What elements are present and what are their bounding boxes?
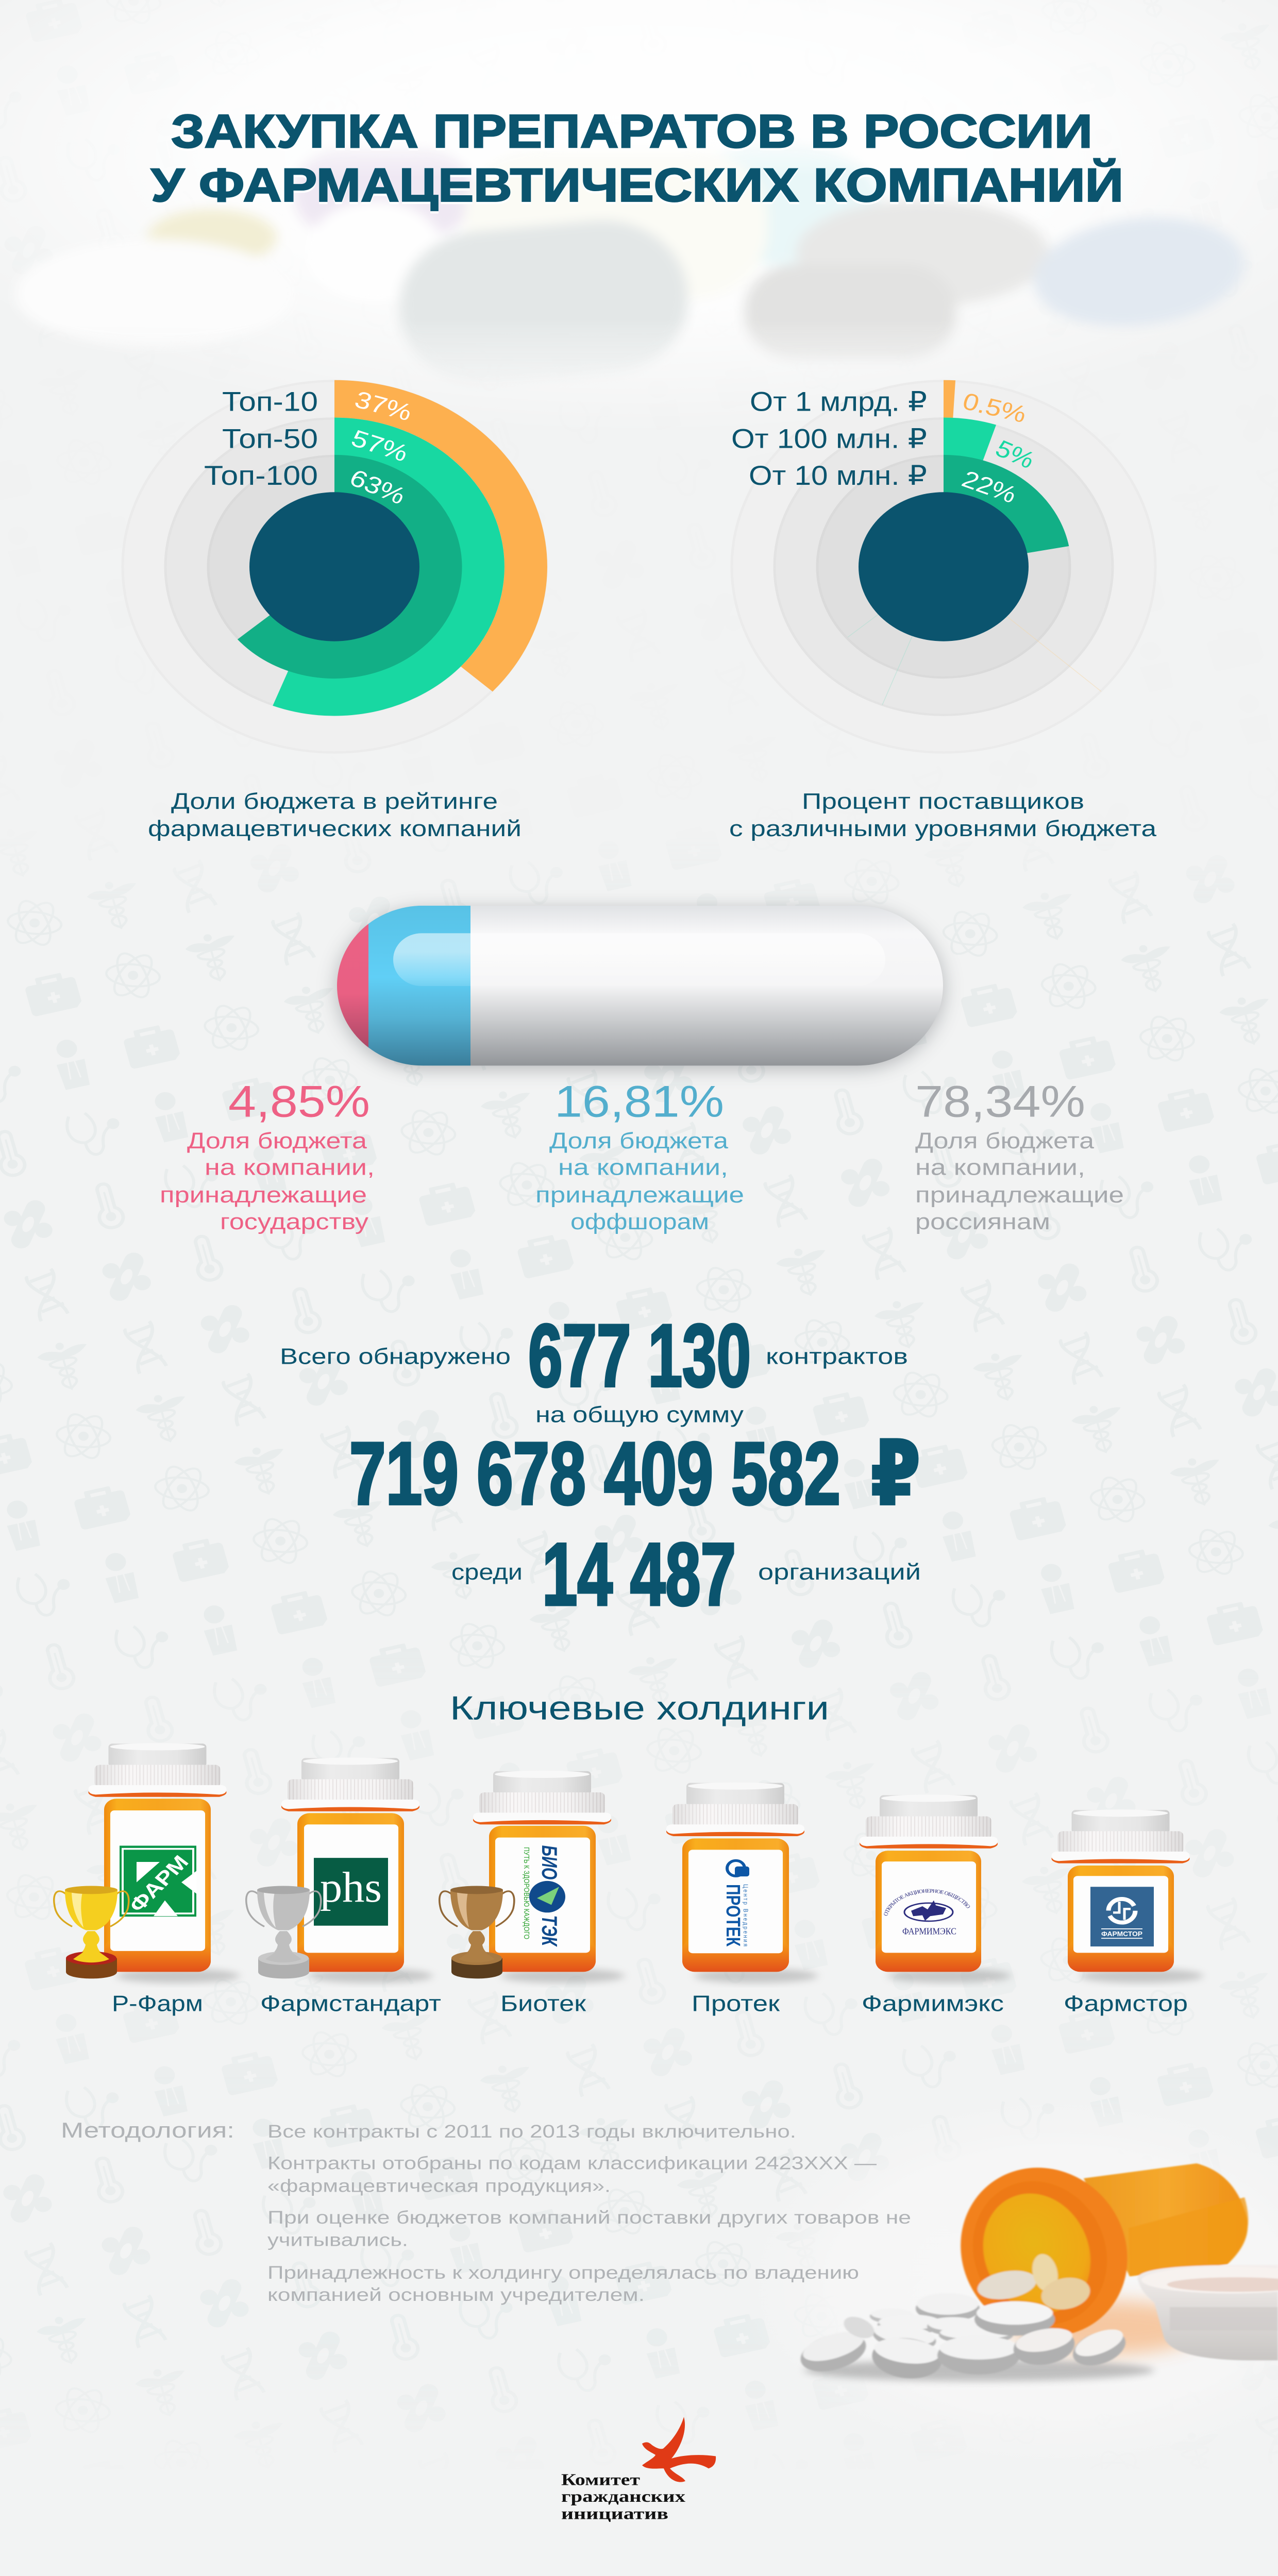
stat: offshore share: 16,81% — [554, 1077, 724, 1126]
segment: russians — [470, 906, 943, 1065]
bottle: Biotek — [473, 1771, 625, 1983]
methodology: Методология: — [61, 2118, 234, 2142]
chart caption — [148, 788, 522, 841]
capsule chart: budget ownership — [337, 906, 943, 1069]
contracts count: 677 130 — [528, 1307, 751, 1405]
organisations count: среди — [451, 1559, 523, 1584]
methodology — [61, 2118, 911, 2304]
logo: Pharmstandard: phs — [320, 1863, 382, 1911]
value labels — [345, 386, 415, 510]
stat: state share: государству — [220, 1209, 369, 1234]
bottle names: Р-Фарм — [112, 1990, 203, 2016]
contracts count: Всего обнаружено — [280, 1343, 511, 1369]
value labels: 63% — [345, 465, 410, 510]
pills in mouth — [974, 2266, 1039, 2303]
stat: offshore share: на компании, — [558, 1155, 728, 1180]
logo: Biotek: БИО — [537, 1845, 561, 1879]
bottle names: Фармимэкс — [862, 1990, 1004, 2016]
guide rings — [123, 381, 546, 753]
chart caption: Процент поставщиков — [802, 788, 1084, 814]
stat: state share: на компании, — [205, 1155, 375, 1180]
logo: Pharmstor: ФАРМСТОР — [1101, 1930, 1142, 1938]
stat: state share: принадлежащие — [160, 1182, 367, 1208]
title — [151, 105, 1123, 211]
bottle names — [112, 1990, 1188, 2016]
value labels: 5% — [991, 435, 1039, 474]
centre disc — [249, 492, 419, 641]
value labels: 22% — [958, 466, 1020, 509]
logo: Protek: Центр Внедрения — [742, 1884, 749, 1946]
methodology: Принадлежность к холдингу определялась по владению — [267, 2262, 859, 2282]
series labels: Топ-50 — [222, 423, 318, 453]
logo: Committee of Civil Initiatives — [561, 2417, 716, 2523]
logo: R-Pharm — [120, 1845, 196, 1917]
logo bird — [642, 2417, 716, 2482]
bottle names: Протек — [692, 1990, 780, 2016]
methodology: Контракты отобраны по кодам классификации 2423XXX — — [267, 2153, 877, 2173]
segment: offshore — [368, 906, 470, 1065]
contracts count: контрактов — [766, 1343, 908, 1369]
guide rings — [732, 381, 1155, 753]
panel: suppliers radial chart — [729, 381, 1157, 841]
heading: key holdings: Ключевые холдинги — [450, 1689, 829, 1727]
stat: russian share: Доля бюджета — [915, 1128, 1095, 1153]
series labels: Топ-100 — [204, 461, 318, 490]
logo: Pharmstor — [1090, 1887, 1154, 1946]
stat: russian share: принадлежащие — [915, 1182, 1124, 1208]
organisations count: 14 487 — [542, 1525, 736, 1624]
stat: state share: 4,85% — [228, 1077, 370, 1126]
title: У ФАРМАЦЕВТИЧЕСКИХ КОМПАНИЙ — [151, 158, 1123, 211]
total sum: на общую сумму — [535, 1401, 744, 1427]
chart caption: фармацевтических компаний — [148, 816, 522, 841]
logo: Protek — [722, 1860, 749, 1946]
stat: russian share: россиянам — [915, 1209, 1050, 1234]
bottle cap — [1137, 2265, 1278, 2361]
logo: Biotek: ТЭК — [537, 1916, 561, 1947]
contracts count — [280, 1307, 908, 1405]
series labels: Топ-10 — [222, 386, 318, 417]
arc: over 1 bln 0.5% — [944, 378, 954, 420]
stat: offshore share — [535, 1077, 744, 1234]
chart caption: с различными уровнями бюджета — [729, 816, 1157, 841]
chart caption: Доли бюджета в рейтинге — [171, 788, 498, 814]
bottle: Pharmstandard — [281, 1757, 433, 1983]
tablets — [795, 2293, 1132, 2382]
bottle: R-Pharm — [89, 1743, 240, 1983]
logo: Pharmimex — [884, 1889, 970, 1937]
logo text: инициатив — [561, 2505, 668, 2523]
bottle names: Биотек — [500, 1990, 586, 2016]
segment: state — [337, 924, 368, 1047]
total sum: ₽ — [871, 1424, 920, 1523]
methodology: учитывались. — [267, 2230, 408, 2250]
arc: top-100 63% — [254, 473, 441, 660]
bottle names: Фармстор — [1064, 1990, 1188, 2016]
stat: russian share: на компании, — [915, 1155, 1085, 1180]
methodology: «фармацевтическая продукция». — [267, 2176, 611, 2196]
bottle names: Фармстандарт — [260, 1990, 441, 2016]
chart caption — [729, 788, 1157, 841]
stat: state share — [160, 1077, 375, 1234]
logo: Pharmimex: ОТКРЫТОЕ АКЦИОНЕРНОЕ ОБЩЕСТВО — [884, 1889, 970, 1916]
bottle: Pharmstor — [1051, 1809, 1203, 1983]
blurred pills photo — [23, 147, 1244, 368]
logo text: гражданских — [561, 2488, 685, 2506]
logo text — [561, 2471, 685, 2523]
illustration: spilled pill bottle — [795, 2152, 1278, 2382]
trophy: silver — [246, 1886, 321, 1978]
logo: Biotek — [523, 1845, 565, 1947]
bottle body — [1084, 2163, 1248, 2276]
trophy: bronze — [440, 1886, 514, 1978]
stat: offshore share: принадлежащие — [535, 1182, 744, 1208]
methodology: компанией основным учредителем. — [267, 2284, 645, 2304]
stat: russian share — [915, 1077, 1124, 1234]
value labels: 57% — [347, 425, 412, 467]
logo: Pharmimex: ФАРМИМЭКС — [902, 1926, 956, 1937]
centre disc — [859, 492, 1029, 641]
bottle mouth — [940, 2152, 1148, 2352]
organisations count: организаций — [758, 1559, 921, 1584]
trophy: gold — [54, 1886, 129, 1978]
logo: R-Pharm: ФАРМ — [125, 1851, 193, 1917]
stat: state share: Доля бюджета — [187, 1128, 367, 1153]
arc: top-10 37% — [334, 399, 526, 679]
value labels: 0.5% — [960, 388, 1030, 428]
methodology: Все контракты с 2011 по 2013 годы включительно. — [267, 2121, 796, 2142]
arc: top-50 57% — [280, 436, 483, 697]
logo text: Комитет — [561, 2471, 640, 2489]
stat: offshore share: оффшорам — [570, 1209, 709, 1234]
series labels: От 10 млн. ₽ — [749, 461, 927, 490]
total sum: 719 678 409 582 — [349, 1424, 840, 1523]
stat: russian share: 78,34% — [915, 1077, 1085, 1126]
value labels — [958, 388, 1039, 509]
totals block — [280, 1307, 921, 1624]
value labels: 37% — [351, 386, 415, 426]
logo: Biotek: ПУТЬ К ЗДОРОВЬЮ КАЖДОГО — [523, 1847, 531, 1939]
series labels — [204, 386, 318, 490]
stat: offshore share: Доля бюджета — [549, 1128, 729, 1153]
bottle: Pharmimex — [860, 1795, 1011, 1986]
arc: over 10 mln 22% — [944, 473, 1048, 550]
series labels — [731, 386, 927, 490]
total sum — [349, 1401, 920, 1523]
title: ЗАКУПКА ПРЕПАРАТОВ В РОССИИ — [171, 105, 1092, 158]
bottle: Protek — [666, 1783, 818, 1983]
logo: Protek: ПРОТЕК — [722, 1884, 744, 1946]
series labels: От 100 млн. ₽ — [731, 423, 927, 453]
panel: budget share radial chart — [123, 381, 546, 841]
arc: over 100 mln 5% — [944, 436, 989, 443]
logo: Pharmstandard — [314, 1858, 388, 1926]
methodology: При оценке бюджетов компаний поставки других товаров не — [267, 2207, 911, 2227]
series labels: От 1 млрд. ₽ — [750, 386, 927, 417]
organisations count — [451, 1525, 921, 1624]
